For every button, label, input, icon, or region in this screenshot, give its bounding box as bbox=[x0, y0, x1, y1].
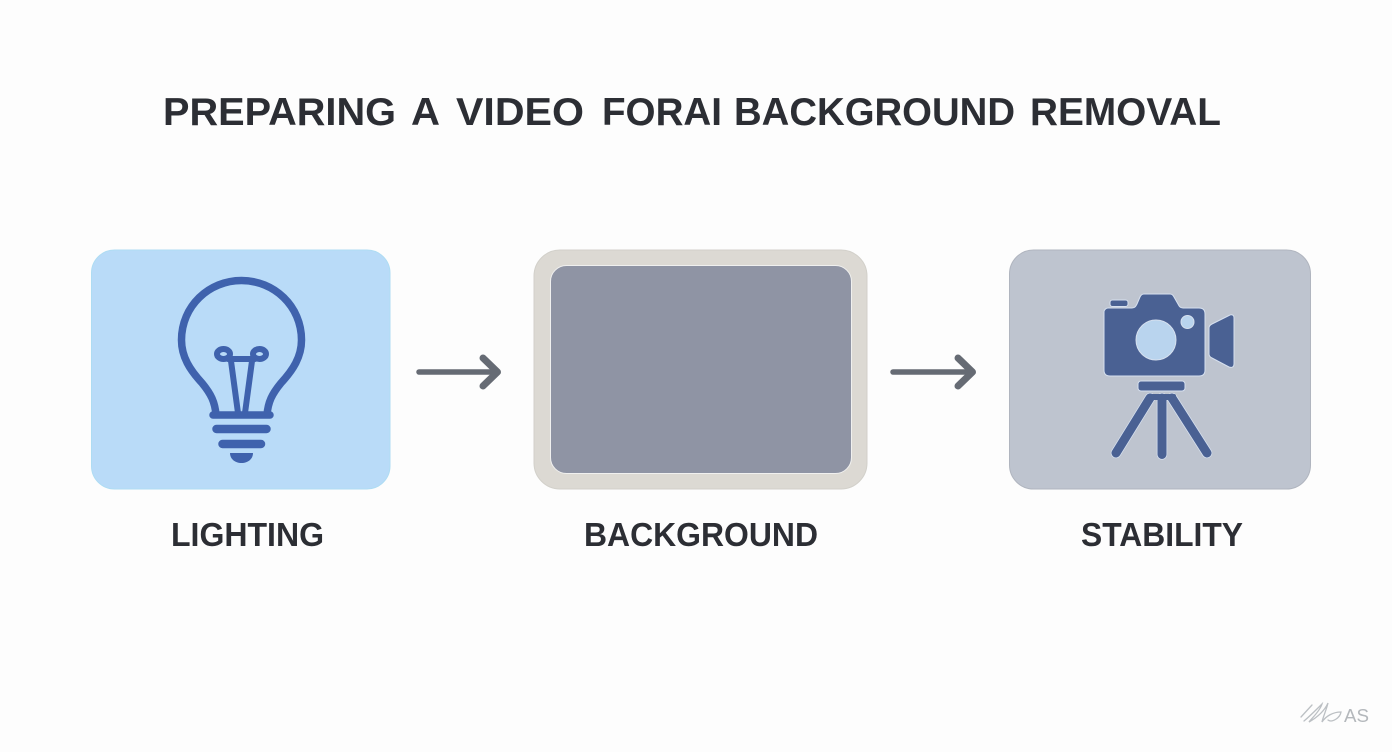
panel: stability bbox=[1010, 250, 1310, 489]
title: A bbox=[411, 91, 440, 134]
label: background: BACKGROUND bbox=[584, 516, 818, 553]
stability card bbox=[1010, 250, 1310, 489]
arrow: background to stability bbox=[893, 358, 972, 386]
watermark bbox=[1301, 703, 1369, 726]
title: FORAI bbox=[602, 91, 722, 134]
title bbox=[163, 91, 1221, 134]
lighting card bbox=[92, 250, 390, 489]
title: BACKGROUND bbox=[734, 91, 1015, 134]
title: REMOVAL bbox=[1030, 91, 1221, 134]
label: lighting: LIGHTING bbox=[171, 516, 324, 553]
background outer frame bbox=[534, 250, 867, 489]
background inner screen bbox=[550, 266, 852, 474]
title: PREPARING bbox=[163, 91, 396, 134]
panel: background bbox=[534, 250, 867, 489]
icon: light bulb bbox=[182, 280, 302, 463]
label: stability: STABILITY bbox=[1081, 516, 1243, 553]
panel: lighting bbox=[92, 250, 390, 489]
title: VIDEO bbox=[456, 91, 584, 134]
icon: camera on tripod bbox=[1104, 294, 1234, 454]
watermark: AS bbox=[1344, 706, 1369, 726]
arrow: lighting to background bbox=[419, 358, 498, 386]
